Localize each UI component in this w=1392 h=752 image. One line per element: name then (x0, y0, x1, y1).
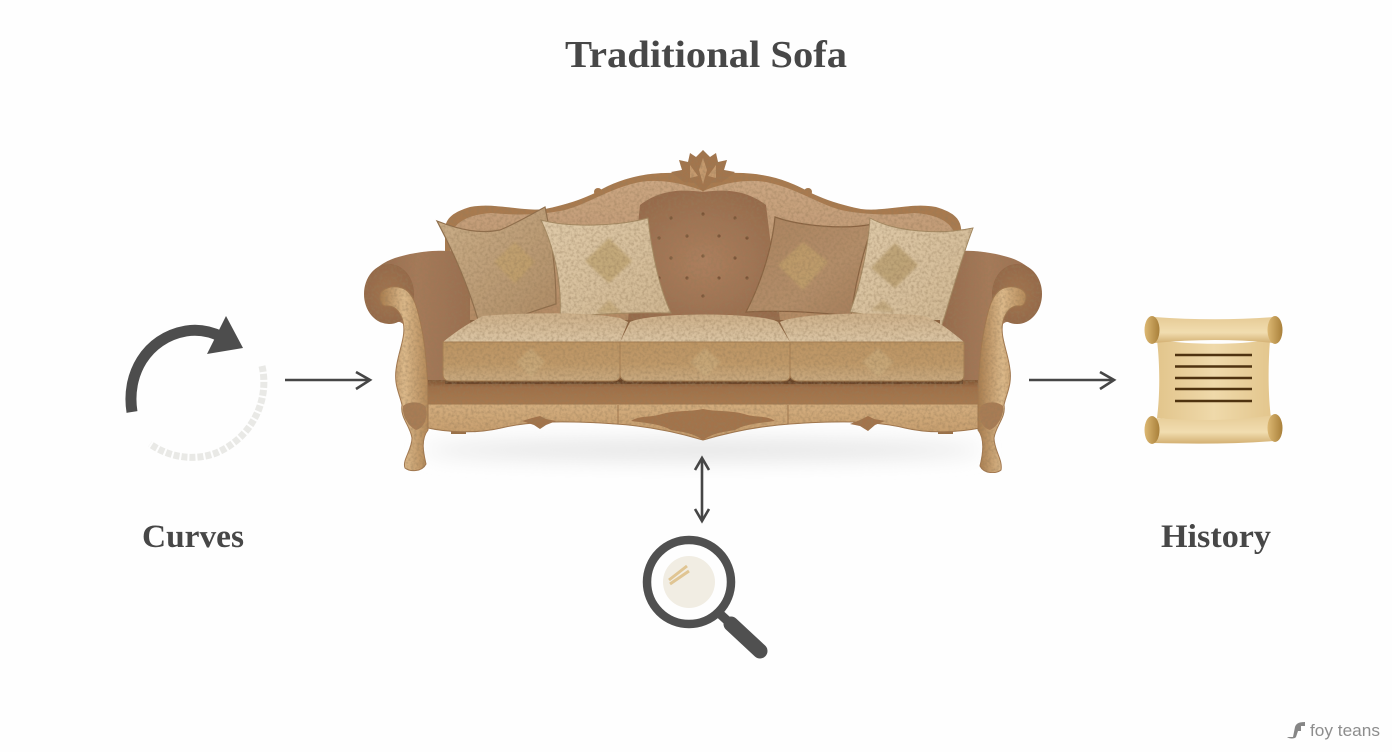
back upholstery (450, 181, 956, 340)
left arm (365, 251, 470, 398)
back frame (445, 160, 961, 340)
tufted centre (628, 191, 780, 320)
text lines (1175, 355, 1252, 401)
back legs (451, 425, 953, 434)
base band (428, 380, 980, 405)
logo mark (1287, 722, 1305, 738)
cushion backing (470, 320, 940, 382)
logo text: foy teans (1310, 721, 1380, 740)
left cushion (443, 313, 628, 381)
sofa (364, 150, 1042, 473)
arrowhead (207, 316, 243, 354)
top roll ends (1144, 316, 1282, 344)
bottom roll ends (1144, 414, 1282, 444)
floor shadow (423, 440, 983, 460)
frame scroll ornaments (594, 188, 812, 196)
rail dividers (618, 405, 788, 424)
label: curves: Curves (142, 519, 244, 555)
bottom roll (1154, 415, 1274, 444)
wooden rail (428, 404, 980, 440)
lens disc (663, 556, 715, 608)
right arm roll (992, 264, 1042, 324)
icon: scroll (1144, 316, 1282, 444)
centre carving (631, 409, 775, 440)
pillow 4 (850, 218, 973, 331)
pillow 3 (746, 217, 873, 316)
middle cushion (620, 314, 790, 381)
watermark logo (1287, 721, 1380, 740)
left arm roll (364, 264, 414, 324)
side carvings (522, 416, 885, 431)
pillow 1 (437, 207, 556, 327)
tufting buttons (657, 212, 749, 298)
solid arc (131, 330, 222, 412)
left leg carving (403, 402, 427, 430)
icon: magnifying glass (647, 540, 760, 651)
dashed faded arc (150, 366, 264, 457)
right leg carving (979, 402, 1003, 430)
pillow 2 (541, 218, 671, 317)
arrow: curves to sofa (285, 372, 370, 389)
right arm (936, 251, 1041, 398)
handle (720, 614, 732, 625)
ring (647, 540, 731, 624)
scroll body (1157, 340, 1271, 422)
arrow: sofa to detail (695, 458, 709, 521)
crest carving (671, 150, 735, 192)
left wood arm and leg (380, 287, 428, 471)
right cushion (780, 314, 964, 381)
label: history: History (1161, 519, 1272, 555)
arrow: sofa to history (1029, 372, 1114, 389)
cushion shadow (445, 378, 963, 384)
icon: curved arrow (131, 316, 264, 457)
right wood arm and leg (978, 287, 1026, 473)
top roll (1154, 317, 1274, 343)
fabric highlight (669, 566, 689, 584)
title: Traditional Sofa (565, 34, 847, 76)
